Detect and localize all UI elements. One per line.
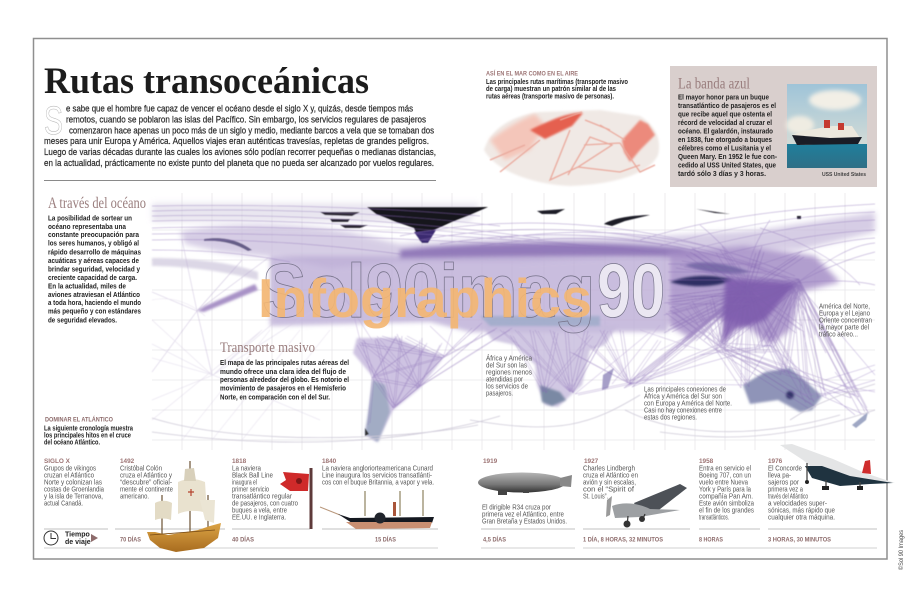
event: 1976: primera vez a [768, 484, 803, 494]
event: 1840: Line inaugura los servicios transatlánti- [322, 470, 433, 480]
map note: north america: Oriente concentran [819, 316, 872, 324]
map note: connections: con Europa y América del Norte. [644, 398, 732, 408]
panel: a través del océano: A través del océano [48, 195, 146, 212]
panel: transporte masivo: Transporte masivo [220, 340, 315, 356]
event: 1976: a velocidades super- [768, 498, 828, 508]
event: 1492: 70 DÍAS [120, 534, 142, 544]
panel: sea and air routes [484, 68, 659, 186]
panel: la banda azul: El mayor honor para un buque [678, 92, 769, 102]
event: 1976: cualquier otra máquina. [768, 512, 835, 522]
panel: transporte masivo: El mapa de las principales rutas aéreas del [220, 358, 349, 367]
panel: la banda azul: La banda azul [678, 76, 750, 92]
map note: africa and south america: atendidas por [486, 374, 524, 384]
event: 1927: con el “Spirit of [583, 484, 634, 494]
icon: black ball line flag [280, 468, 312, 529]
event: 1919: El dirigible R34 cruza por [482, 502, 552, 512]
panel: a través del océano: a toda hora, haciendo el mundo [48, 298, 141, 307]
panel: transporte masivo: Norte, en comparación con el del Sur. [220, 392, 330, 402]
event: 1919: 4,5 DÍAS [483, 534, 507, 544]
event: 1958: Entra en servicio el [699, 464, 751, 472]
panel: dominar el atlántico [44, 414, 134, 446]
intro text: Luego de varias décadas durante las cuales los aviones sólo podían recorrer pequeñas o medianas distancias, [44, 147, 436, 157]
event: 1958: 1958 [699, 458, 714, 465]
event: 1919: primera vez el Atlántico, entre [482, 510, 564, 518]
panel: dominar el atlántico: del océano Atlántico. [44, 438, 100, 446]
map note: africa and south america: África y América [486, 354, 532, 362]
map note: connections: África y América del Sur son [644, 392, 722, 400]
map note: north america: tráfico aéreo... [819, 330, 858, 338]
map note: connections: Las principales conexiones de [644, 384, 726, 394]
event: 1818: 40 DÍAS [232, 534, 255, 544]
event: 1818: primer servicio [232, 484, 269, 494]
event: 1840: 1840 [322, 458, 337, 465]
southern arcs [152, 384, 875, 442]
panel: la banda azul: Queen Mary. En 1952 le fue con- [678, 152, 777, 161]
Greenland and Arctic islands [367, 207, 488, 242]
panel: la banda azul: cedido al USS United States, que [678, 160, 776, 170]
panel: la banda azul: récord de velocidad al cruzar el [678, 118, 772, 127]
map note: africa and south america: pasajeros. [486, 388, 513, 398]
Africa [480, 322, 617, 407]
event: 1958: compañía Pan Am. [699, 492, 753, 500]
event: 1976 [768, 458, 835, 544]
panel: la banda azul: que recibe aquel que ostenta el [678, 110, 772, 118]
event: 1927: Charles Lindbergh [583, 464, 635, 472]
event: 1818: inaugura el [232, 478, 257, 486]
event: 1976: través del Atlántico [768, 492, 808, 500]
small map of shipping routes [484, 110, 659, 186]
event: 1927 [583, 458, 664, 544]
map note: connections: estas dos regiones. [644, 412, 697, 422]
event: 1958: Este avión simboliza [699, 498, 754, 508]
panel: a través del océano: aviones atraviesan el Atlántico [48, 290, 140, 299]
event: siglo X: actual Canadá. [44, 498, 83, 508]
panel: sea and air routes: ASÍ EN EL MAR COMO EN EL AIRE [486, 68, 579, 78]
drop cap: S [44, 99, 63, 143]
watermark: Sol90imag [262, 249, 595, 334]
panel: sea and air routes: Las principales rutas marítimas (transporte masivo [486, 77, 628, 86]
event: 1976: 1976 [768, 458, 783, 465]
event: 1958 [699, 458, 754, 544]
event: 1818: La naviera [232, 464, 261, 472]
event: 1492: “descubre” oficial- [120, 478, 173, 486]
event: 1492: americano. [120, 492, 149, 500]
map note: north america [819, 302, 872, 338]
Madagascar [602, 368, 614, 390]
map note: north america: la mayor parte del [819, 322, 869, 332]
event: 1492: 1492 [120, 458, 135, 465]
map note: connections [644, 384, 732, 422]
event: 1976: lleva pa- [768, 470, 792, 480]
intro text: meses para unir Europa y América. Aquellos viajes eran auténticas travesías, repletas de grandes peligros. [44, 136, 429, 146]
event: 1840 [322, 458, 434, 544]
panel: dominar el atlántico: los principales hitos en el cruce [44, 430, 131, 440]
panel: la banda azul: USS United States [822, 172, 866, 178]
hub fan lines [624, 246, 869, 415]
watermark: Infographics [258, 267, 592, 329]
panel: a través del océano: acuáticas y aéreas capaces de [48, 256, 139, 265]
panel: transporte masivo: mundo ofrece una clara idea del flujo de [220, 367, 346, 376]
world map of air routes [152, 193, 875, 450]
land and traffic masses [152, 203, 875, 442]
event: 1919: Gran Bretaña y Estados Unidos. [482, 516, 567, 526]
intro text [44, 99, 436, 168]
panel: la banda azul: tardó sólo 3 días y 3 horas. [678, 169, 766, 178]
intro text: e sabe que el hombre fue capaz de vencer el océano desde el siglo X y, quizás, desde tiempos más [66, 104, 413, 114]
panel: a través del océano: de seguridad elevados. [48, 316, 117, 324]
panel: transporte masivo [220, 340, 349, 402]
panel: la banda azul: célebres como el Lusitania y el [678, 144, 771, 152]
credit: ©Sol 90 Images [897, 529, 905, 570]
panel: a través del océano: creciente capacidad de carga. [48, 273, 137, 282]
event: 1840: 15 DÍAS [375, 534, 397, 544]
event: siglo X [44, 458, 104, 508]
event: 1492 [120, 458, 173, 544]
event: 1919 [482, 458, 567, 544]
panel: a través del océano: océano representaba una [48, 222, 127, 231]
africa and south america fan lines [357, 323, 693, 425]
event: 1927: avión y sin escalas, [583, 478, 636, 486]
event: 1818: de pasajeros, con cuatro [232, 498, 298, 508]
panel: a través del océano: La posibilidad de sortear un [48, 214, 132, 222]
event: 1840: cos con el buque Britannia, a vapor y vela. [322, 478, 434, 486]
event: 1976: sajeros por [768, 478, 800, 486]
intro text: remotos, cuando se poblaron las islas del Pacífico. Sin embargo, los servicios regulares de pasajeros [66, 114, 426, 124]
event: 1958: Boeing 707, con un [699, 470, 751, 480]
event: 1976: 3 HORAS, 30 MINUTOS [768, 536, 832, 544]
icon: clock with travel time: Tiempo [65, 532, 90, 538]
event: siglo X: Grupos de vikingos [44, 464, 96, 472]
panel: la banda azul [670, 66, 877, 187]
event: 1958: York y París para la [699, 484, 751, 494]
event: 1818 [232, 458, 298, 544]
event: siglo X: Norte y colonizan las [44, 478, 102, 486]
panel: a través del océano: los seres humanos, y obligó al [48, 238, 139, 248]
watermark: 90 [597, 249, 665, 334]
panel: a través del océano: brindar seguridad, velocidad y [48, 264, 141, 274]
map note: africa and south america: regiones menos [486, 368, 532, 376]
event: siglo X: cruzan el Atlántico [44, 470, 94, 480]
panel: a través del océano: En la actualidad, miles de [48, 282, 126, 290]
image: ocean liner [786, 84, 867, 168]
title: Rutas transoceánicas [44, 61, 369, 102]
event: 1976: El Concorde [768, 464, 802, 472]
Australia [743, 368, 822, 412]
illustration: concorde [780, 444, 895, 490]
panel: transporte masivo: personas alrededor del globo. Es notorio el [220, 375, 349, 384]
map note: africa and south america: del Sur son las [486, 360, 527, 370]
panel: la banda azul: océano. El galardón, instaurado [678, 126, 773, 136]
map note: africa and south america [486, 354, 532, 398]
panel: a través del océano [48, 195, 146, 324]
panel: a través del océano: más pequeño y con estándares [48, 306, 141, 316]
event: 1818: Black Ball Line [232, 470, 273, 480]
illustration: steamship britannia [320, 490, 434, 529]
oceania lines [628, 283, 875, 415]
timeline [44, 444, 895, 552]
long-haul route lines [152, 204, 875, 304]
event: 1492: mente el continente [120, 484, 173, 494]
event: 1927: 1 DÍA, 8 HORAS, 32 MINUTOS [583, 534, 664, 544]
panel: a través del océano: rápido desarrollo de máquinas [48, 248, 141, 256]
event: 1958: transatlánticos. [699, 512, 729, 522]
intro text: comenzaron hace apenas un poco más de un siglo y medio, mediante barcos a vela que se tomaban dos [69, 126, 434, 136]
map note: connections: Casi no hay conexiones entre [644, 406, 722, 414]
event: 1840: La naviera angloriorteamericana Cunard [322, 464, 433, 472]
event: siglo X: y la isla de Terranova, [44, 492, 103, 500]
icon: clock with travel time [44, 531, 98, 546]
event: siglo X: costas de Groenlandia [44, 484, 104, 494]
pacific lines [152, 240, 700, 440]
event: 1818: transatlántico regular [232, 492, 293, 500]
panel: sea and air routes: rutas aéreas (transporte masivo de personas). [486, 92, 614, 100]
map note: north america: Europa y el Lejano [819, 308, 870, 318]
illustration: spirit of st. louis [606, 484, 687, 528]
panel: dominar el atlántico: DOMINAR EL ATLÁNTICO [45, 414, 113, 424]
New Zealand [852, 412, 868, 428]
event: 1976: sónicas, más rápido que [768, 506, 835, 514]
event: 1492: cruza el Atlántico y [120, 470, 172, 480]
intro text: en la actualidad, prácticamente no existe punto del planeta que no pueda ser alcanzado por vuelos regulares. [44, 158, 434, 168]
event: 1927: 1927 [584, 458, 599, 465]
event: 1919: 1919 [483, 458, 498, 465]
South America [353, 338, 443, 442]
panel: a través del océano: constante preocupación para [48, 230, 140, 239]
map note: africa and south america: los servicios de [486, 382, 528, 390]
illustration: airship R34 [478, 472, 572, 495]
panel: la banda azul: transatlántico de pasajeros es el [678, 101, 776, 110]
map note: north america: América del Norte, [819, 302, 870, 310]
event: 1958: 8 HORAS [699, 536, 723, 544]
icon: clock with travel time: de viaje [65, 539, 91, 546]
panel: dominar el atlántico: La siguiente cronología muestra [44, 424, 134, 432]
event: 1927: cruza el Atlántico en [583, 470, 638, 480]
event: 1818: 1818 [232, 458, 247, 465]
event: 1492: Cristóbal Colón [120, 464, 162, 472]
event: 1958: vuelo entre Nueva [699, 478, 748, 486]
illustration: caravel [147, 461, 221, 552]
event: 1958: el fin de los grandes [699, 506, 754, 514]
event: 1818: EE.UU. e Inglaterra. [232, 512, 286, 522]
panel: transporte masivo: movimiento de pasajeros en el Hemisferio [220, 384, 346, 392]
event: 1927: St. Louis”. [583, 492, 608, 500]
panel: sea and air routes: de carga) muestran un patrón similar al de las [486, 84, 616, 93]
event: siglo X: SIGLO X [44, 458, 71, 465]
event: 1818: buques a vela, entre [232, 506, 287, 514]
panel: la banda azul: en 1838, fue otorgado a buques [678, 135, 772, 144]
